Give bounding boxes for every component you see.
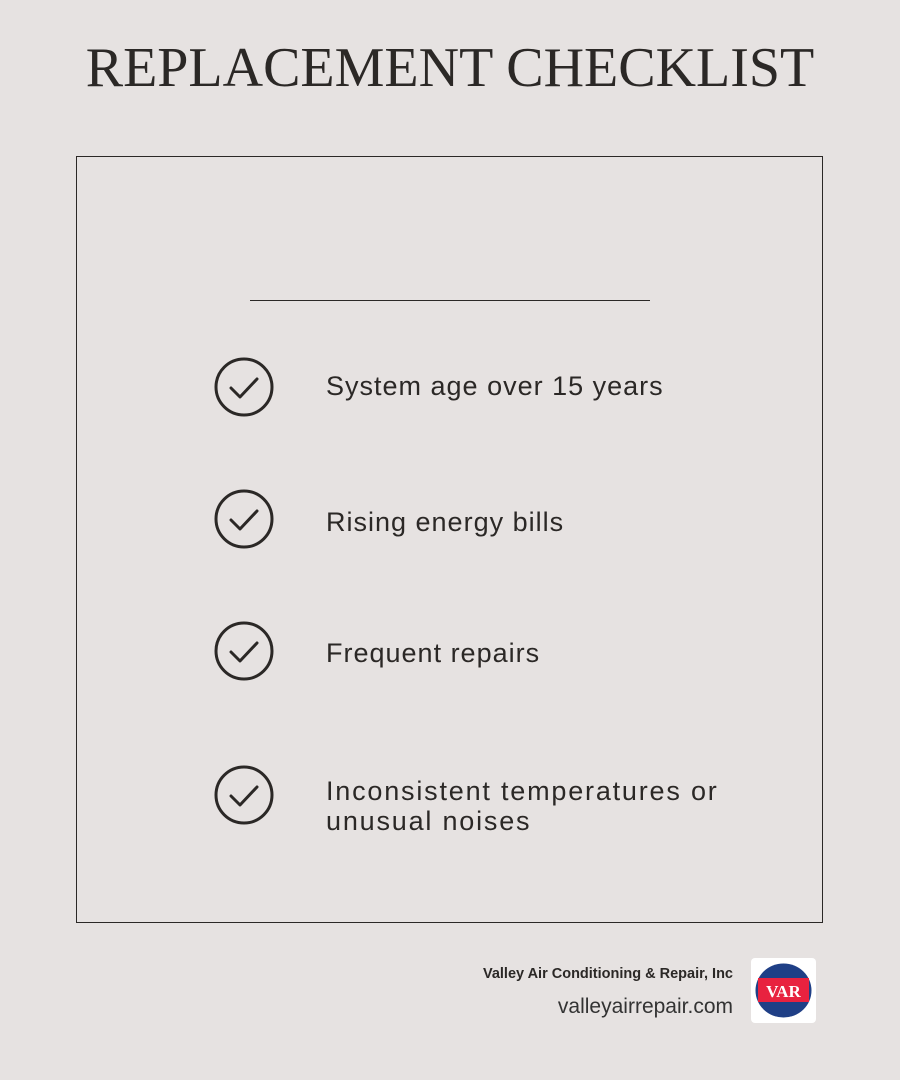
- icon: check 1: [214, 358, 274, 416]
- icon: check 4: [214, 766, 274, 824]
- icon: check 2: [214, 490, 274, 548]
- item 3 text: Frequent repairs: [326, 638, 540, 668]
- icon: check 3: [214, 622, 274, 680]
- logo: [751, 958, 816, 1023]
- item 4 text: unusual noises: [326, 806, 531, 836]
- website: valleyairrepair.com: [558, 995, 733, 1018]
- logo: VAR: [766, 982, 802, 1001]
- item 4 text: Inconsistent temperatures or: [326, 776, 719, 806]
- item 4 text: [326, 776, 719, 836]
- item 1 text: System age over 15 years: [326, 371, 664, 401]
- title: REPLACEMENT CHECKLIST: [86, 37, 814, 99]
- panel: checklist: [76, 156, 823, 923]
- item 2 text: Rising energy bills: [326, 507, 564, 537]
- divider line: [250, 300, 650, 301]
- company name: Valley Air Conditioning & Repair, Inc: [483, 966, 733, 982]
